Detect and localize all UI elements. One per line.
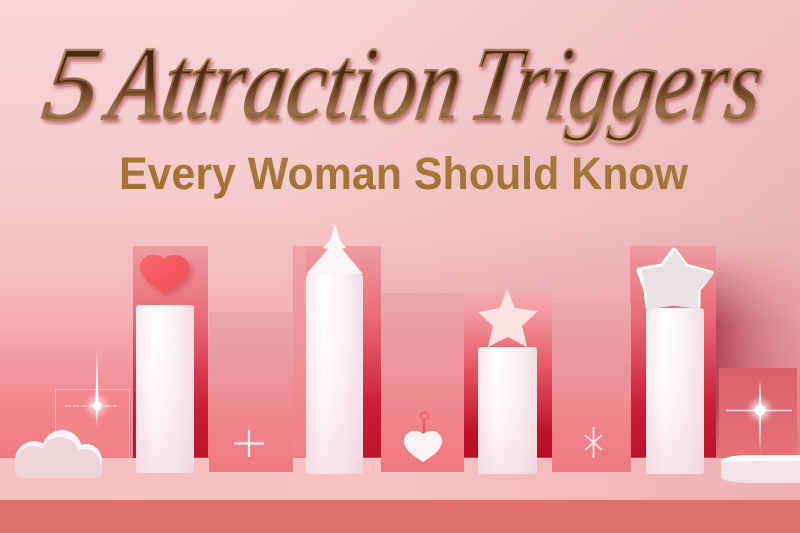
band: lower wall strip (194, 457, 716, 470)
pillar 3 (478, 347, 537, 474)
icon: small star on pillar 3 (478, 289, 538, 347)
subtitle: Every Woman Should Know (119, 148, 689, 199)
shelf top (0, 458, 800, 500)
icon: asterisk sparkle (585, 427, 602, 458)
icon: right sparkle (726, 380, 792, 453)
wall shadow right of the tall panel (716, 250, 800, 460)
panel: small left glass panel (56, 390, 130, 466)
panel: front panel 2 (209, 312, 293, 472)
shelf front (0, 500, 800, 533)
panel: back panel 3 light left strip (293, 246, 306, 470)
icon: white heart on a ring (404, 412, 442, 462)
panel: back panel 6 (630, 246, 716, 470)
title numeral: 5 (36, 26, 109, 143)
pillar 2 with cone top (306, 224, 363, 474)
icon: red heart (140, 255, 193, 297)
panel: right square panel (719, 368, 797, 470)
title (36, 26, 771, 143)
icon: left sparkle (65, 350, 117, 427)
pillar 1 (136, 305, 194, 473)
cloud body (15, 437, 102, 482)
back panels (133, 246, 716, 470)
floor shelf (0, 458, 800, 533)
title word: Attraction: Attraction (97, 26, 471, 143)
panel: centre backing (464, 293, 552, 470)
icon: cloud (15, 430, 102, 482)
panel: front panel 5 (552, 303, 631, 472)
panel: back panel 1 (133, 246, 208, 470)
cone (306, 246, 363, 274)
panel: front panel 4 (381, 293, 464, 472)
cloud highlight rim (15, 430, 102, 467)
pillar 4 (646, 308, 704, 474)
panel: back panel 3 (293, 246, 381, 470)
finial (323, 224, 346, 250)
shaft (306, 274, 363, 474)
icon: big star on pillar 4 (639, 250, 711, 308)
icon: plus sparkle (234, 430, 264, 457)
round disc pedestal (721, 455, 800, 483)
